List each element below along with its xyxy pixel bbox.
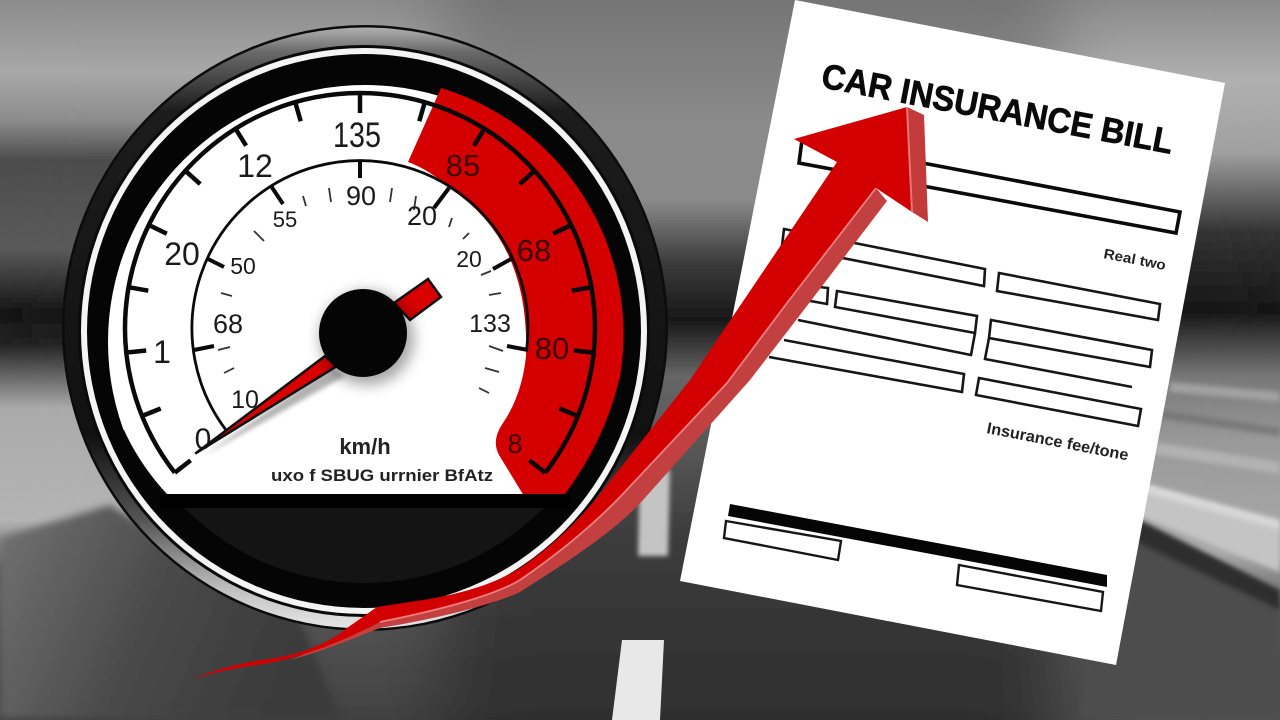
outer scale numbers: [153, 116, 381, 456]
rising red arrow: [190, 107, 928, 680]
lower black panel: [185, 508, 543, 583]
road centre dash lower: [612, 640, 664, 720]
insurance field label: Insurance fee/tone: [985, 420, 1130, 464]
arrow highlight edge: [380, 188, 876, 622]
inner scale numbers: [213, 181, 511, 414]
unit label: km/h: [339, 434, 391, 459]
needle hub: [319, 289, 414, 385]
outer scale numbers: 20: [164, 236, 200, 272]
form fields: [769, 229, 1160, 426]
bill title: CAR INSURANCE BILL: [819, 57, 1176, 162]
road centre dash upper: [638, 470, 670, 556]
inner scale numbers: 50: [230, 253, 256, 279]
red zone numbers: 68: [517, 233, 551, 268]
outer scale numbers: 12: [237, 148, 273, 184]
inner scale numbers: 133: [469, 310, 511, 338]
red zone: [408, 88, 624, 496]
speedometer gauge: [62, 25, 668, 631]
arrow face: [190, 107, 912, 680]
dial lower corners: [115, 380, 630, 494]
arrow side facet: [290, 188, 887, 660]
small caption: uxo f SBUG urrnier BfAtz: [271, 466, 493, 485]
red zone numbers: [446, 148, 569, 459]
needle: [196, 279, 441, 456]
arrow head highlight: [907, 107, 912, 212]
inner scale numbers: 20: [456, 246, 482, 272]
red zone numbers: 8: [507, 429, 523, 459]
outer scale numbers: 135: [333, 116, 381, 155]
outer scale numbers: 1: [153, 334, 171, 370]
arrow head facet: [907, 107, 928, 222]
inner scale numbers: 90: [346, 181, 376, 211]
red zone numbers: 80: [535, 331, 569, 366]
outer scale with ticks: [125, 93, 595, 473]
inner scale numbers: 20: [407, 201, 437, 231]
header field: [799, 140, 1180, 233]
outer scale numbers: 0: [195, 423, 211, 456]
inner scale numbers: 10: [231, 386, 259, 414]
inner scale numbers: 68: [213, 309, 243, 339]
insurance bill paper: [680, 0, 1225, 665]
small field label: Real two: [1102, 245, 1167, 273]
red zone numbers: 85: [446, 148, 480, 183]
gauge bezel: [62, 25, 668, 631]
inner scale with ticks: [192, 160, 528, 430]
inner scale numbers: 55: [273, 207, 297, 232]
paper sheet: [680, 0, 1225, 665]
total bar: [728, 504, 1107, 587]
gauge dial face: [108, 85, 624, 494]
total fields: [724, 521, 1103, 611]
